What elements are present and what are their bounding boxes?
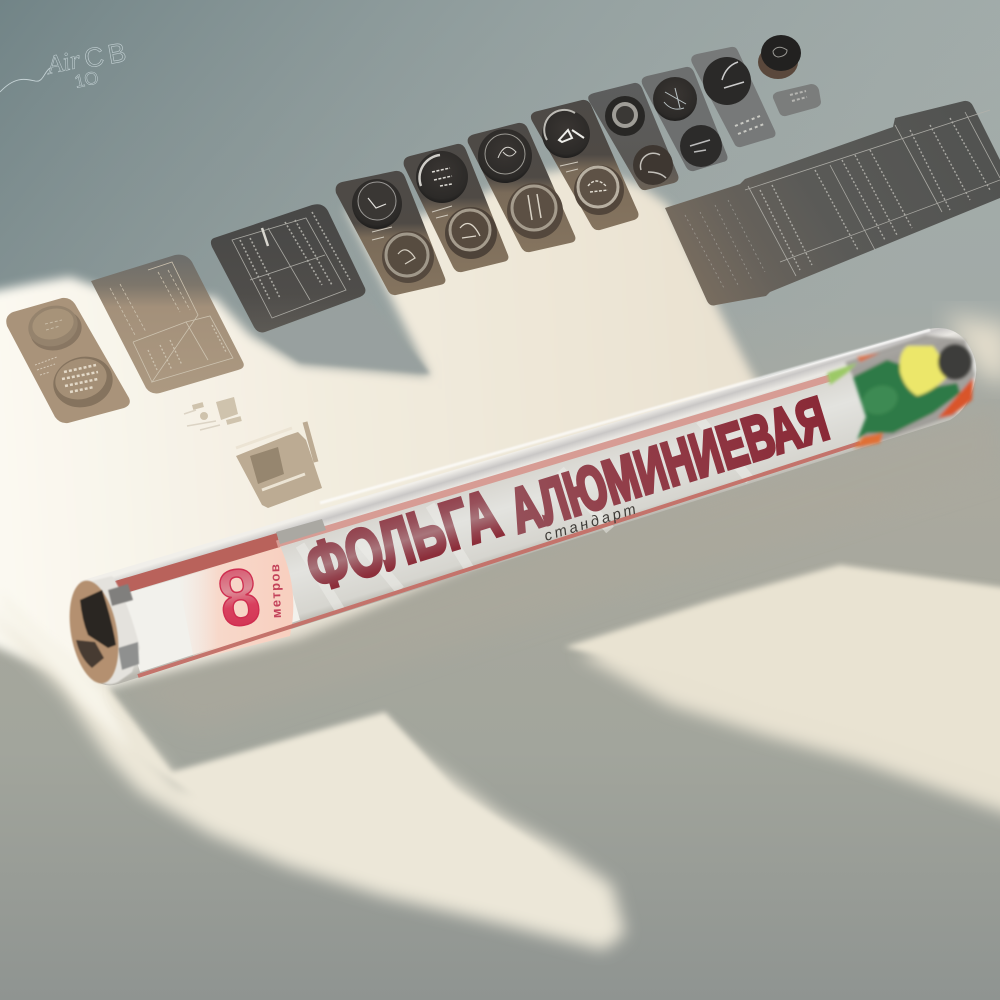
panel: tan spec sheet <box>91 255 244 393</box>
panel: pair of dials 4 <box>531 100 638 230</box>
panel: pair of dials 1 <box>336 171 445 295</box>
printer illustration (faint) <box>184 397 322 508</box>
swirl on label <box>300 420 750 610</box>
lower red stripe <box>138 443 860 676</box>
foil roll <box>62 328 976 687</box>
panel: pair of dials 3 <box>468 123 575 252</box>
scribbled logo <box>0 37 128 92</box>
white left wrap <box>118 548 300 672</box>
panel: dark spec sheet <box>211 204 365 332</box>
upper pink stripe <box>277 378 830 544</box>
vegetables picture <box>827 335 975 448</box>
silver foil end <box>88 576 140 684</box>
unit metres: метров <box>267 564 284 618</box>
panel: tan blister with two tablets <box>6 298 130 423</box>
number 8: 8 <box>211 550 266 645</box>
light patch: lower right <box>565 565 1000 818</box>
scribbled logo: Air <box>42 44 84 80</box>
white sheen <box>320 330 930 503</box>
panel: pair of dials 5 <box>588 83 678 190</box>
panel: pair of dials 6 <box>642 67 728 171</box>
panel: pair of dials 2 <box>404 144 508 272</box>
roll contact shadow <box>120 400 1000 730</box>
roll end with core <box>62 577 126 687</box>
roll body <box>80 328 976 685</box>
scribbled logo: CB <box>82 37 128 74</box>
shadow under dark panel <box>255 296 430 374</box>
small gray tag <box>773 84 821 116</box>
silver band near label <box>276 519 326 544</box>
heading word 1: ФОЛЬГА <box>298 475 509 606</box>
light patch: main window light <box>0 166 790 690</box>
upper red band <box>115 533 280 595</box>
heading word 2: АЛЮМИНИЕВАЯ <box>502 385 836 546</box>
subheading: стандарт <box>542 500 641 545</box>
light patch: lower left strip and pointed patch <box>0 590 625 950</box>
icon: black cap <box>758 35 801 79</box>
panel: large dark instruction sheet <box>665 101 1000 305</box>
scribbled logo: 1O <box>73 67 100 92</box>
peach block <box>178 546 293 660</box>
light patch: right of roll <box>945 315 1000 385</box>
panel: single dial with small text <box>691 47 776 147</box>
